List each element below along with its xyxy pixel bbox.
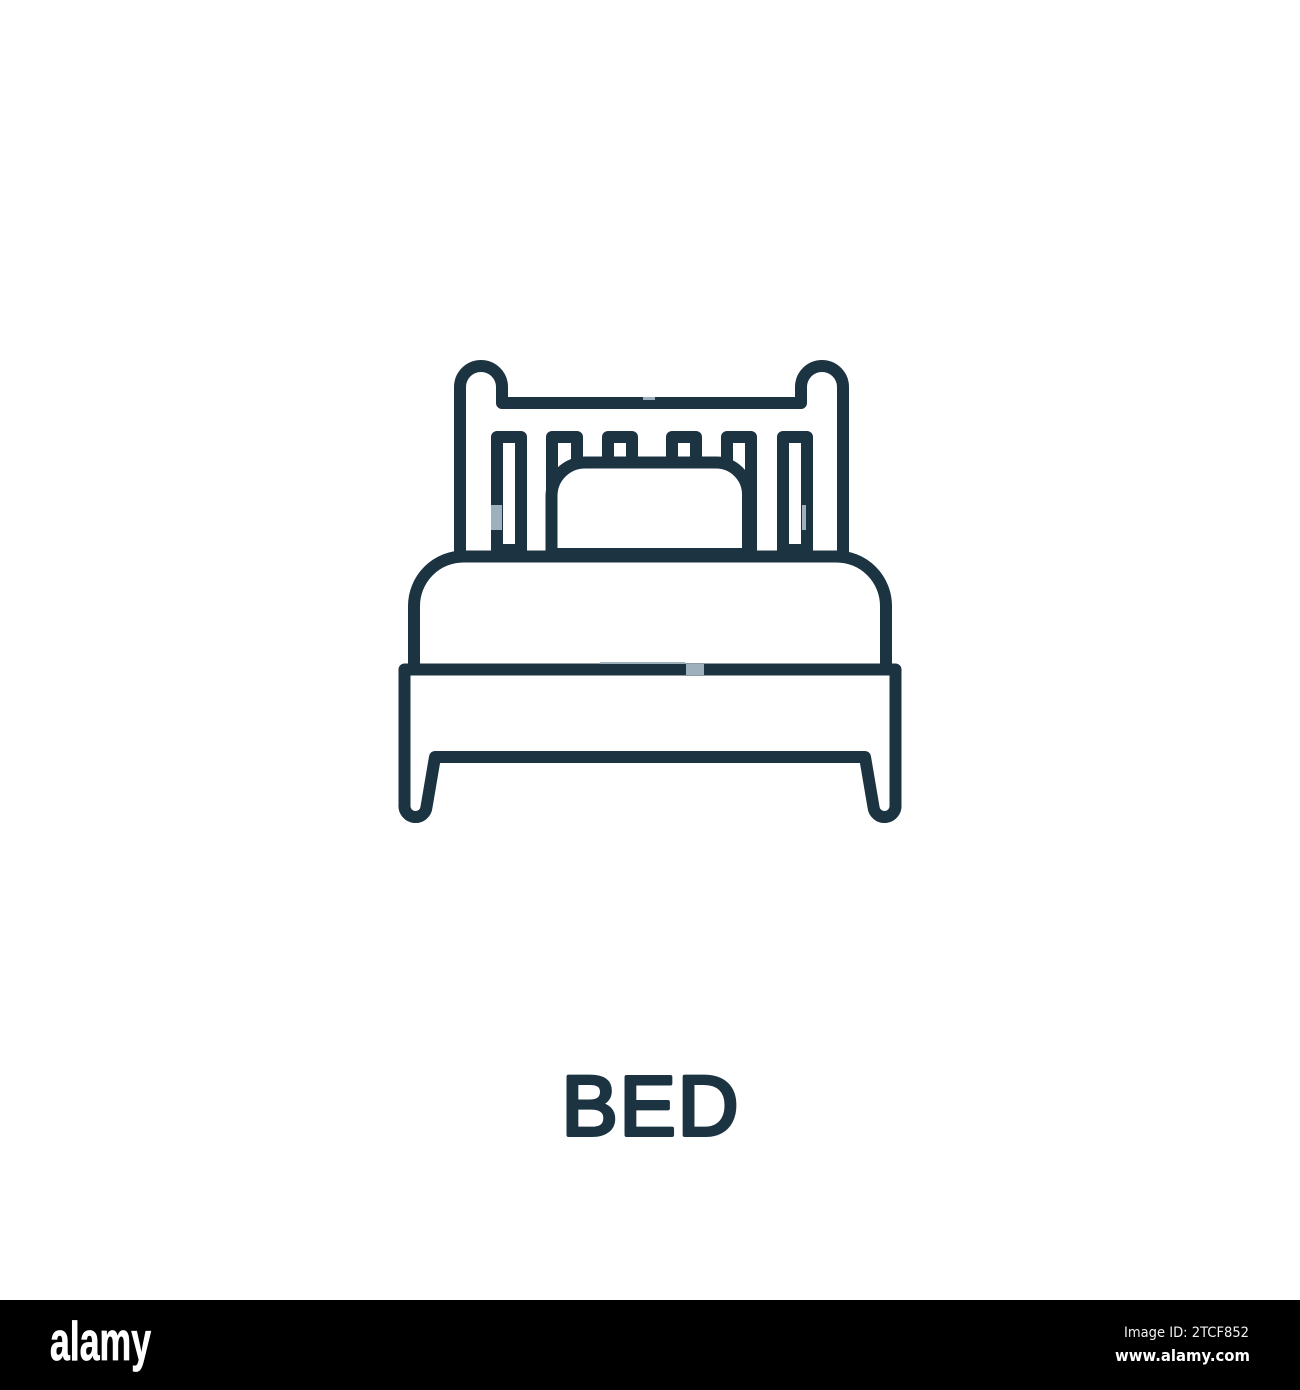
bed base and legs [404,670,896,817]
headboard slats [497,437,807,550]
icon: bed [404,366,896,817]
pillow [552,462,748,554]
headboard frame [460,366,843,556]
footer logo: alamy: alamy [50,1310,151,1372]
website url: www.alamy.com [1115,1346,1250,1365]
watermark remnants [491,397,806,675]
image id: Image ID: 2TCF852 [1124,1325,1249,1341]
title: BED: BED [562,1059,740,1153]
mattress [414,556,886,669]
footer bar [0,1300,1300,1390]
